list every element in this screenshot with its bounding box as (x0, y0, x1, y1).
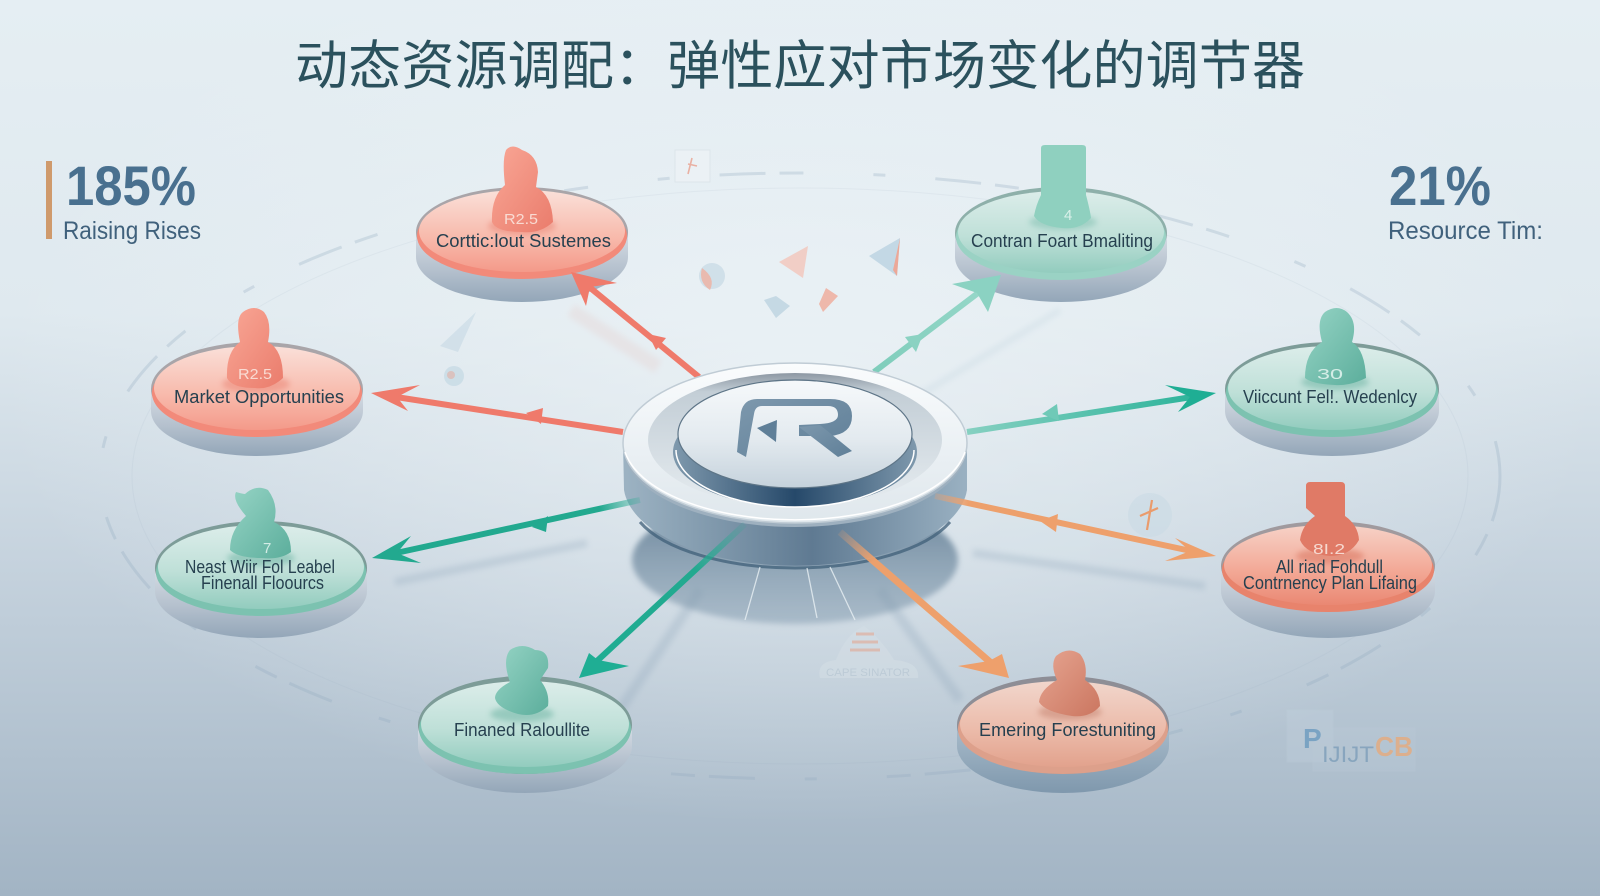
label: Finenall Floourcs (201, 573, 324, 593)
figure (495, 646, 548, 715)
hub button shadow (673, 397, 917, 507)
stat: 185% (46, 154, 201, 245)
node: Emering Forestuniting (957, 650, 1169, 793)
hub recess (648, 373, 942, 507)
ghost logo text, lower right: P (1303, 723, 1322, 754)
label: Corttic:lout Sustemes (436, 231, 611, 251)
arrow: hub to Contticlout Sustemes (571, 272, 699, 377)
label: All riad Fohdull (1276, 557, 1383, 577)
dashed orbit ring (100, 173, 1500, 779)
figure: 30 (1317, 366, 1343, 383)
figure (1034, 145, 1091, 228)
label: Emering Forestuniting (979, 720, 1156, 740)
figure (492, 146, 553, 232)
label: Contran Foart Bmaliting (971, 231, 1153, 251)
node: Finaned Raloullite (418, 646, 632, 793)
decorative faint shapes (440, 150, 1172, 560)
label: Viiccunt Fel!. Wedenlcy (1243, 387, 1417, 407)
arrow: hub to Finaned Raloullite (579, 524, 745, 678)
arrow: hub to Emering Forestuniting (840, 532, 1009, 678)
hub reflection (632, 496, 958, 624)
arrow: hub to Market Opportunities (371, 385, 623, 432)
node: Neast Wiir Fol Leabel (155, 488, 367, 638)
stat: 185%: 185% (66, 154, 196, 217)
central hub (623, 363, 967, 624)
node: Contticlout Sustemes (416, 146, 628, 302)
ghost logo text, lower right: CB (1375, 731, 1413, 762)
figure (1039, 650, 1100, 716)
figure: R2.5 (504, 211, 538, 228)
node: Contran Foart Bmaliting (955, 145, 1167, 302)
ghost logo text, lower right (1287, 710, 1415, 771)
label: Neast Wiir Fol Leabel (185, 557, 335, 577)
arrow: hub to Neast Wiir Fol Leabel (372, 500, 640, 563)
label: Finaned Raloullite (454, 720, 590, 740)
ghost shadows of arrows (395, 310, 1205, 722)
node: Viiccunt Fel. Wedenlcy (1225, 308, 1439, 456)
stat: 21%: 21% (1389, 154, 1491, 217)
label (1243, 557, 1417, 593)
hub button (678, 380, 912, 488)
stat: 21% (1388, 154, 1543, 245)
node: Contrnency Plan Lifaing (1221, 482, 1435, 638)
arrow: hub to Viiccunt Fel. Wedenlcy (967, 385, 1216, 432)
cloud icon, faint: CAPE SINATOR (826, 667, 910, 679)
node: Market Opportunities (151, 308, 363, 456)
figure: 4 (1064, 207, 1072, 224)
ghost logo text, lower right: IJIJT (1322, 742, 1374, 767)
hub logo (737, 399, 852, 457)
figure: R2.5 (238, 366, 272, 383)
figure (227, 308, 283, 388)
figure (230, 488, 291, 558)
figure (1305, 308, 1366, 385)
stat: 21%: Resource Tim: (1388, 217, 1543, 245)
label: Market Opportunities (174, 387, 344, 407)
figure (1300, 482, 1359, 558)
figure: 8I.2 (1313, 541, 1345, 558)
label: Contrnency Plan Lifaing (1243, 573, 1417, 593)
label (185, 557, 335, 593)
arrow: hub to Contran Foart Bmaliting (874, 275, 1001, 372)
figure: 7 (263, 540, 271, 557)
title: 动态资源调配：弹性应对市场变化的调节器 (295, 37, 1305, 96)
hub side wall (623, 442, 967, 566)
stat: 185%: Raising Rises (63, 217, 201, 245)
cloud icon, faint (819, 626, 918, 679)
hub outer ring (623, 367, 967, 527)
arrow: hub to Contrnency Plan Lifaing (935, 496, 1216, 561)
